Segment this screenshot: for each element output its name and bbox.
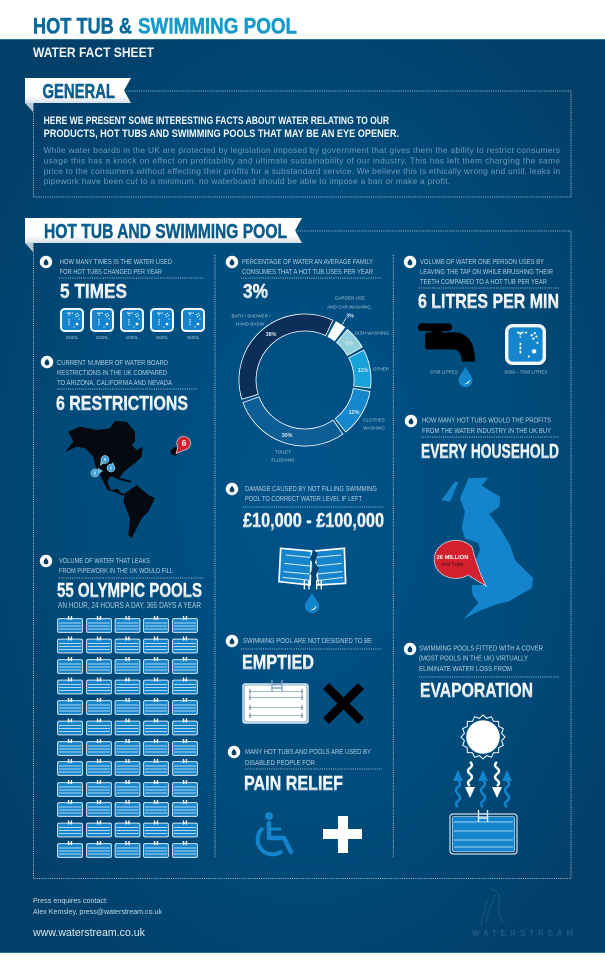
title: SWIMMING POOL [138, 14, 297, 38]
fact: 6 litres per min: 6 LITRES PER MIN [418, 290, 559, 313]
banner: general: GENERAL [42, 81, 115, 103]
footer contact [32, 898, 163, 939]
fact: 6 litres per min: VOLUME OF WATER ONE PERSON USES BY [420, 259, 544, 266]
fact: 6 restrictions: 6 RESTRICTIONS [56, 392, 188, 415]
icon: wheelchair [258, 812, 291, 854]
markers: US states: 8 [94, 470, 97, 476]
intro paragraph [44, 145, 560, 186]
icons: five hot tubs: 1500L [96, 335, 109, 340]
markers: US states: 8 [104, 457, 107, 462]
icon: evaporation arrows up [453, 770, 512, 807]
banner: general [25, 78, 131, 112]
chart: water use donut: 38% [266, 332, 277, 338]
title [33, 14, 297, 38]
panel: general [25, 78, 571, 197]
title: HOT TUB & [33, 14, 132, 38]
icons: five hot tubs: 1500L [66, 335, 79, 340]
intro paragraph: usage this has a knock on effect on profitability and ultimate sustainability of our industry. This has left them charging the same [44, 156, 560, 166]
fact: 6 restrictions: CURRENT NUMBER OF WATER BOARD [57, 360, 168, 367]
icon: sun [461, 715, 505, 759]
fact: pain relief: MANY HOT TUBS AND POOLS ARE USED BY [245, 749, 371, 756]
logo: waterstream [472, 889, 573, 938]
icons: five hot tubs [61, 309, 204, 340]
fact: 55 olympic pools: AN HOUR, 24 HOURS A DAY, 365 DAYS A YEAR [58, 601, 201, 610]
banner: hot tub and swimming pool: HOT TUB AND SWIMMING POOL [44, 221, 287, 243]
intro heading [44, 115, 399, 140]
fact: emptied [226, 635, 382, 724]
fact: 6 litres per min: LEAVING THE TAP ON WHILE BRUSHING THEIR [420, 269, 553, 276]
icon: water drop [305, 592, 319, 613]
fact: 55 olympic pools: 55 OLYMPIC POOLS [57, 580, 202, 602]
marker: UK 6 [176, 436, 190, 454]
fact: 5 times [40, 256, 204, 340]
icons: grid of pools [58, 616, 197, 857]
fact: 3 percent: CONSUMES THAT A HOT TUB USES PER YEAR [242, 269, 373, 276]
logo: waterstream: WATERSTREAM [472, 929, 573, 938]
chart: water use donut: DISH WASHING [355, 330, 389, 336]
icon: cracked pool [279, 548, 346, 589]
fact: evaporation: EVAPORATION [420, 679, 533, 702]
marker: UK 6: 6 [182, 438, 187, 448]
chart: water use donut: TOILET [275, 450, 291, 454]
fact: every household [405, 415, 559, 619]
fact: every household: FROM THE WATER INDUSTRY IN THE UK BUY [422, 428, 551, 435]
icon: covered pool [450, 810, 517, 854]
footer contact: Alex Kemsley, press@waterstream.co.uk [33, 909, 163, 916]
icon: white plus [323, 816, 362, 853]
fact: 6 litres per min: 5000 – 7500 LITRES [505, 370, 547, 374]
fact: 6 litres per min [404, 256, 559, 387]
chart: water use donut: 3% [346, 314, 354, 320]
icon: hot tub [507, 326, 544, 363]
chart: water use donut: 30% [282, 433, 293, 439]
icon: empty pool [242, 680, 308, 724]
fact: 6 restrictions: TO ARIZONA, CALIFORNIA AND NEVADA [57, 380, 172, 387]
icons: five hot tubs: 1500L [187, 335, 200, 340]
chart: water use donut: OTHER [373, 366, 390, 372]
icon: water drop [458, 366, 473, 387]
icon: tap [418, 323, 475, 362]
markers: US states: 0 [110, 466, 113, 470]
intro heading: HERE WE PRESENT SOME INTERESTING FACTS ABOUT WATER RELATING TO OUR [44, 115, 389, 127]
fact: 6 litres per min: 6736 LITRES [430, 370, 458, 374]
panel: hot tub and swimming pool [25, 218, 571, 878]
fact: every household: HOW MANY HOT TUBS WOULD THE PROFITS [422, 418, 551, 424]
fact: emptied: SWIMMING POOL ARE NOT DESIGNED TO BE [243, 638, 372, 645]
fact: 3 percent [226, 256, 390, 462]
fact: 6 restrictions: RESTRICTIONS IN THE UK COMPARED [57, 370, 167, 377]
callout: 26 million hot tubs [434, 540, 486, 586]
chart: water use donut: BATH / SHOWER / [232, 314, 271, 318]
fact: 55 olympic pools [40, 555, 203, 857]
callout: 26 million hot tubs: 26 MILLION [437, 555, 468, 561]
chart: water use donut: 11% [358, 368, 368, 374]
chart: water use donut: AND CAR WASHING [327, 304, 371, 310]
fact: 6 litres per min: TEETH COMPARED TO A HOT TUB PER YEAR [420, 279, 547, 286]
chart: water use donut: CLOTHES [363, 418, 385, 422]
fact: emptied: EMPTIED [242, 651, 314, 674]
callout: 26 million hot tubs: Hot Tubs [442, 562, 464, 568]
fact: 6 restrictions [41, 356, 197, 538]
fact: pain relief [228, 746, 382, 854]
chart: water use donut: HAND BASIN [236, 322, 264, 326]
fact: pain relief: DISABLED PEOPLE FOR [245, 760, 315, 767]
fact: 55 olympic pools: FROM PIPEWORK IN THE UK WOULD FILL [59, 568, 173, 575]
subtitle: WATER FACT SHEET [33, 44, 154, 60]
fact: damage cost: £10,000 - £100,000 [243, 510, 384, 532]
map: UK [442, 478, 533, 619]
chart: water use donut: WASHING [363, 426, 385, 430]
footer contact: Press enquires contact: [33, 898, 108, 905]
footer contact: www.waterstream.co.uk [32, 927, 145, 939]
fact: 3 percent: 3% [243, 280, 268, 303]
banner: hot tub and swimming pool [25, 218, 302, 252]
intro heading: PRODUCTS, HOT TUBS AND SWIMMING POOLS THAT MAY BE AN EYE OPENER. [44, 128, 399, 140]
fact: damage cost: DAMAGE CAUSED BY NOT FILLING SWIMMING [245, 486, 377, 493]
map: americas [65, 421, 179, 538]
intro paragraph: pipework have been cut to a minimum, no waterboard should be able to impose a ban or make a profit. [44, 176, 450, 186]
intro paragraph: While water boards in the UK are protected by legislation imposed by government that gives them the ability to restrict consumers [44, 145, 560, 155]
fact: 5 times: HOW MANY TIMES IS THE WATER USED [60, 259, 172, 266]
fact: evaporation: (MOST POOLS IN THE UK) VIRTUALLY [419, 656, 528, 662]
chart: water use donut: FLUSHING [271, 458, 295, 462]
intro paragraph: price to the consumers without effecting their profits for a substandard service. We believe this is ethically wrong and until, leaks in [44, 166, 560, 176]
fact: evaporation: ELIMINATE WATER LOSS FROM [419, 666, 512, 673]
markers: US states [91, 456, 115, 477]
fact: 55 olympic pools: VOLUME OF WATER THAT LEAKS [59, 558, 150, 565]
fact: evaporation [404, 643, 559, 854]
icon: heat arrows down [465, 762, 502, 798]
chart: water use donut: 6% [345, 341, 353, 347]
fact: 5 times: 5 TIMES [60, 280, 127, 303]
fact: damage cost [226, 483, 384, 613]
icon: black cross [323, 683, 364, 724]
fact: 3 percent: PERCENTAGE OF WATER AN AVERAGE FAMILY [242, 259, 373, 266]
chart: water use donut: 12% [349, 410, 360, 416]
fact: pain relief: PAIN RELIEF [244, 772, 343, 795]
icons: five hot tubs: 1500L [156, 335, 169, 340]
fact: damage cost: POOL TO CORRECT WATER LEVEL IF LEFT [245, 496, 363, 503]
icons: five hot tubs: 1500L [126, 335, 139, 340]
chart: water use donut: GARDEN USE [335, 296, 365, 300]
fact: evaporation: SWIMMING POOLS FITTED WITH A COVER [419, 646, 543, 652]
chart: water use donut [232, 296, 390, 462]
fact: 5 times: FOR HOT TUBS CHANGED PER YEAR [60, 269, 162, 276]
